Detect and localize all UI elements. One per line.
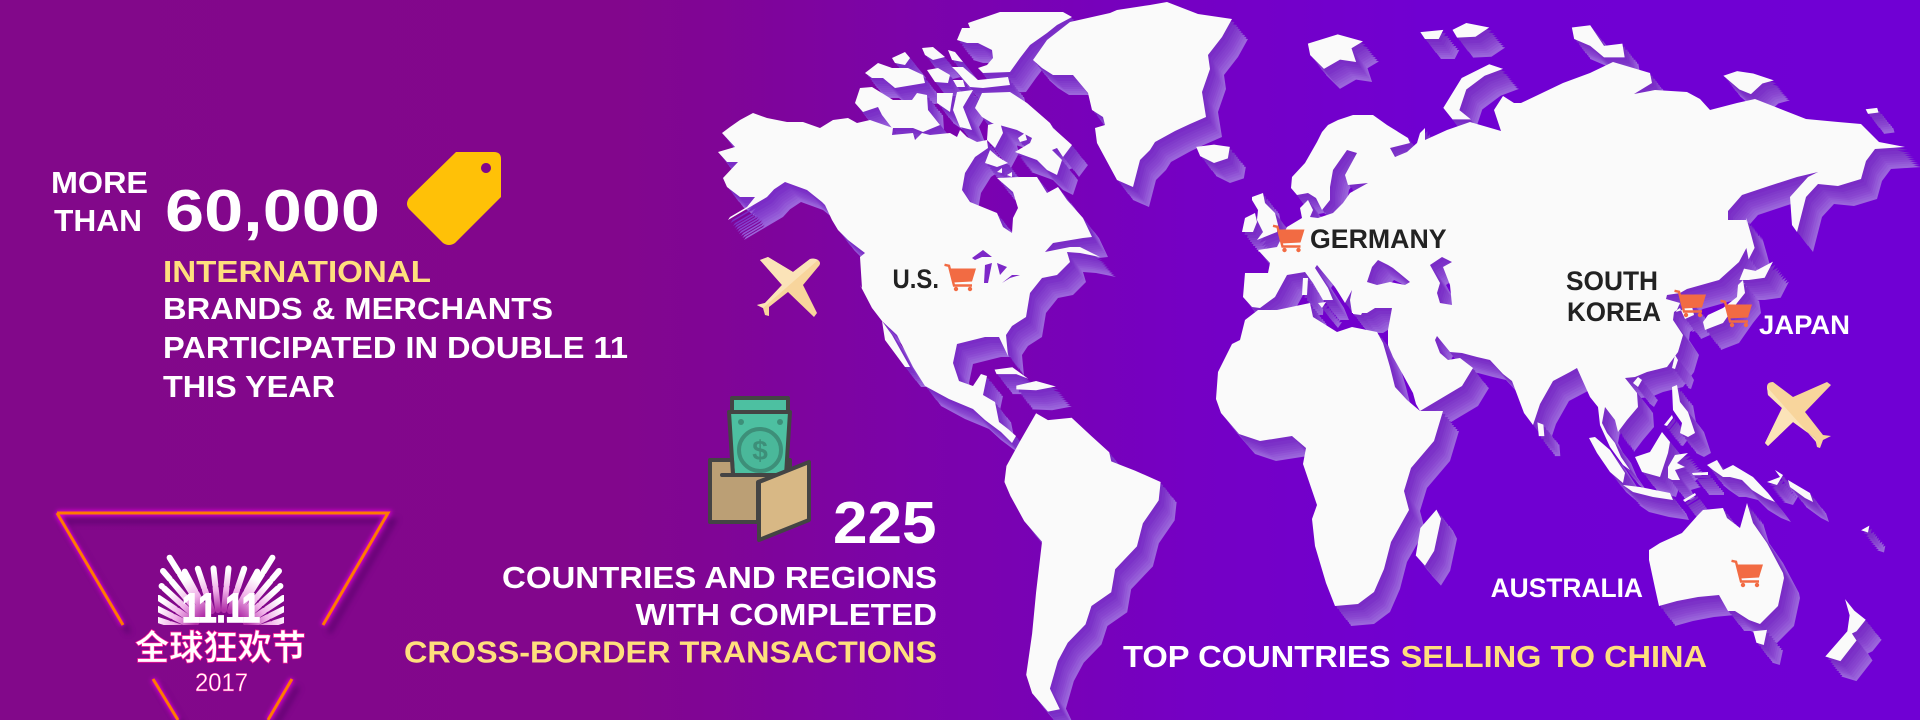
- year: 2017: [195, 669, 248, 697]
- label: Germany: GERMANY: [1310, 224, 1447, 254]
- countries and regions: COUNTRIES AND REGIONS: [502, 560, 937, 595]
- stat: 60,000 brands: [51, 152, 628, 404]
- chinese title: 全球狂欢节: [135, 629, 306, 668]
- heading: top countries: SELLING TO CHINA: [1401, 639, 1707, 674]
- label: U.S.: U.S.: [892, 264, 939, 294]
- logo: 11.11 global shopping festival 2017: [57, 513, 394, 720]
- map landmasses: [718, 2, 1905, 712]
- world map: [718, 2, 1920, 720]
- 11.11 numerals: 11.11: [182, 585, 260, 631]
- international: INTERNATIONAL: [163, 254, 431, 289]
- heading: top countries: [1123, 639, 1707, 674]
- icon: price tag: [407, 152, 501, 245]
- icon: right airplane: [1765, 382, 1831, 448]
- brands and merchants: BRANDS & MERCHANTS: [163, 291, 553, 326]
- icon: cart Australia: [1732, 561, 1763, 587]
- icon: cart South Korea: [1674, 291, 1706, 317]
- number 60,000: 60,000: [165, 178, 380, 244]
- than: THAN: [54, 203, 142, 238]
- icon: cart Japan: [1720, 301, 1752, 327]
- icon: cart U.S.: [944, 265, 976, 291]
- icon: money in box: $: [752, 435, 768, 466]
- label: Japan: JAPAN: [1759, 310, 1850, 340]
- icon: money in box: [710, 398, 809, 540]
- heading: top countries: TOP COUNTRIES: [1123, 639, 1390, 674]
- with completed: WITH COMPLETED: [636, 597, 937, 632]
- cross-border transactions: CROSS-BORDER TRANSACTIONS: [404, 634, 937, 670]
- label: South: SOUTH: [1566, 266, 1658, 296]
- stat: 225 countries: [404, 490, 937, 670]
- number 225: 225: [833, 490, 936, 556]
- great lakes: [972, 250, 1020, 283]
- participated line: PARTICIPATED IN DOUBLE 11: [163, 330, 628, 365]
- icon: left airplane: [757, 257, 820, 317]
- map extruded shadow: [720, 5, 1920, 720]
- label: Australia: AUSTRALIA: [1491, 573, 1643, 603]
- icon: cart Germany: [1273, 226, 1304, 252]
- firework rays: [158, 554, 284, 625]
- more than: MORE: [51, 165, 148, 200]
- neon triangle: [57, 513, 394, 720]
- label: Korea: KOREA: [1567, 297, 1661, 327]
- this year: THIS YEAR: [163, 369, 335, 404]
